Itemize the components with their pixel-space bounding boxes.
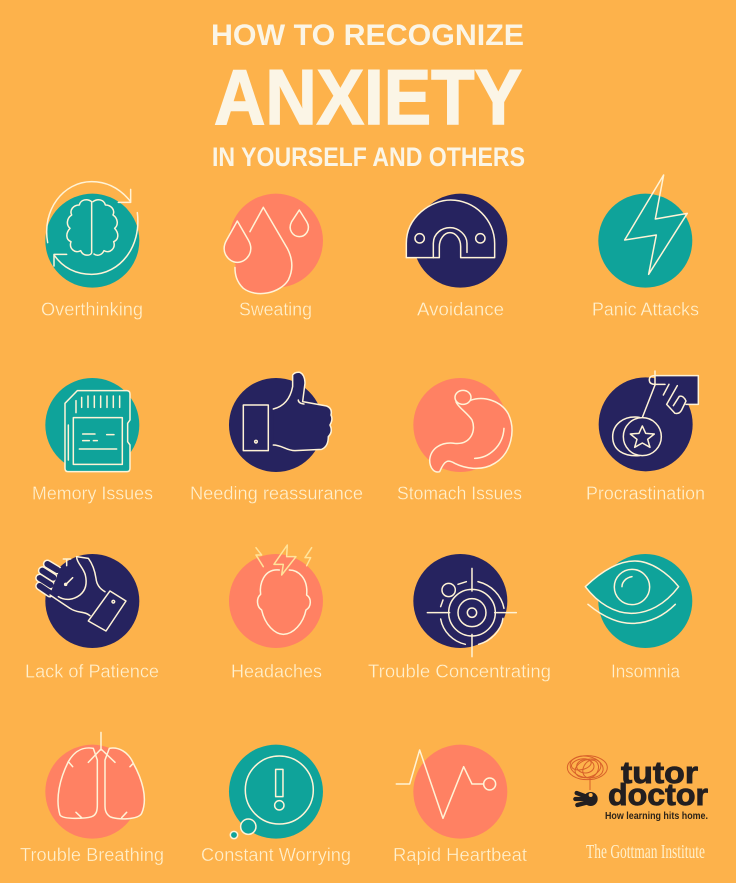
wordmark: tutor bbox=[621, 755, 698, 790]
label: Sweating: Sweating bbox=[239, 300, 312, 320]
panel: Insomnia bbox=[585, 554, 692, 682]
icon: cave dome bbox=[406, 194, 507, 288]
icon: thumbs up bbox=[229, 372, 332, 472]
panel: Stomach Issues bbox=[397, 378, 522, 504]
panel: Trouble Breathing bbox=[20, 732, 164, 865]
label: Lack of Patience: Lack of Patience bbox=[25, 662, 159, 682]
label: Needing reassurance: Needing reassurance bbox=[190, 484, 363, 504]
label: Stomach Issues: Stomach Issues bbox=[397, 484, 522, 504]
title bbox=[211, 19, 525, 172]
icon: lungs bbox=[45, 732, 144, 839]
panel: Panic Attacks bbox=[592, 175, 699, 320]
label: Procrastination: Procrastination bbox=[586, 484, 705, 504]
icon: eye bbox=[585, 554, 692, 648]
panel: Memory Issues bbox=[32, 378, 153, 504]
label: Trouble Breathing: Trouble Breathing bbox=[20, 845, 164, 865]
icon: lightning bolt bbox=[598, 175, 692, 288]
title: IN YOURSELF AND OTHERS bbox=[212, 142, 525, 172]
panel: Lack of Patience bbox=[25, 554, 159, 682]
panel: Overthinking bbox=[41, 182, 143, 320]
panel: Sweating bbox=[224, 194, 323, 320]
tagline: How learning hits home. bbox=[605, 811, 708, 822]
title: HOW TO RECOGNIZE bbox=[211, 19, 524, 52]
panel: Procrastination bbox=[586, 371, 705, 504]
panel: Trouble Concentrating bbox=[368, 554, 551, 682]
panel: Avoidance bbox=[406, 194, 507, 320]
label: Trouble Concentrating: Trouble Concentrating bbox=[368, 662, 551, 682]
label: Memory Issues: Memory Issues bbox=[32, 484, 153, 504]
label: Panic Attacks: Panic Attacks bbox=[592, 300, 699, 320]
label: Insomnia: Insomnia bbox=[611, 662, 681, 682]
logo: Tutor Doctor bbox=[567, 753, 708, 822]
label: Overthinking: Overthinking bbox=[41, 300, 143, 320]
title: ANXIETY bbox=[214, 53, 522, 141]
icon: stomach bbox=[413, 378, 512, 472]
icon: brain with cycle arrows bbox=[45, 182, 139, 288]
panel: Constant Worrying bbox=[201, 745, 351, 865]
icon: scribble brain and hand bbox=[567, 753, 607, 806]
icon: head with lightning bbox=[229, 545, 323, 648]
icon: yo-yo and hand bbox=[599, 371, 698, 471]
wordmark bbox=[608, 755, 708, 812]
icon: heartbeat line bbox=[396, 745, 507, 839]
panel: Rapid Heartbeat bbox=[393, 745, 527, 865]
icon: sweat drops bbox=[224, 194, 323, 294]
wordmark: doctor bbox=[608, 777, 708, 812]
icon: thought bubble with exclamation bbox=[229, 745, 323, 839]
label: Rapid Heartbeat: Rapid Heartbeat bbox=[393, 845, 527, 865]
label: Constant Worrying: Constant Worrying bbox=[201, 845, 351, 865]
label: Headaches: Headaches bbox=[231, 662, 322, 682]
icon: memory card bbox=[45, 378, 139, 472]
panel: Needing reassurance bbox=[190, 372, 363, 504]
panel: Headaches bbox=[229, 545, 323, 682]
icon: hand holding stopwatch bbox=[40, 554, 139, 648]
label: Avoidance: Avoidance bbox=[417, 300, 504, 320]
icon: target crosshair bbox=[413, 554, 516, 657]
